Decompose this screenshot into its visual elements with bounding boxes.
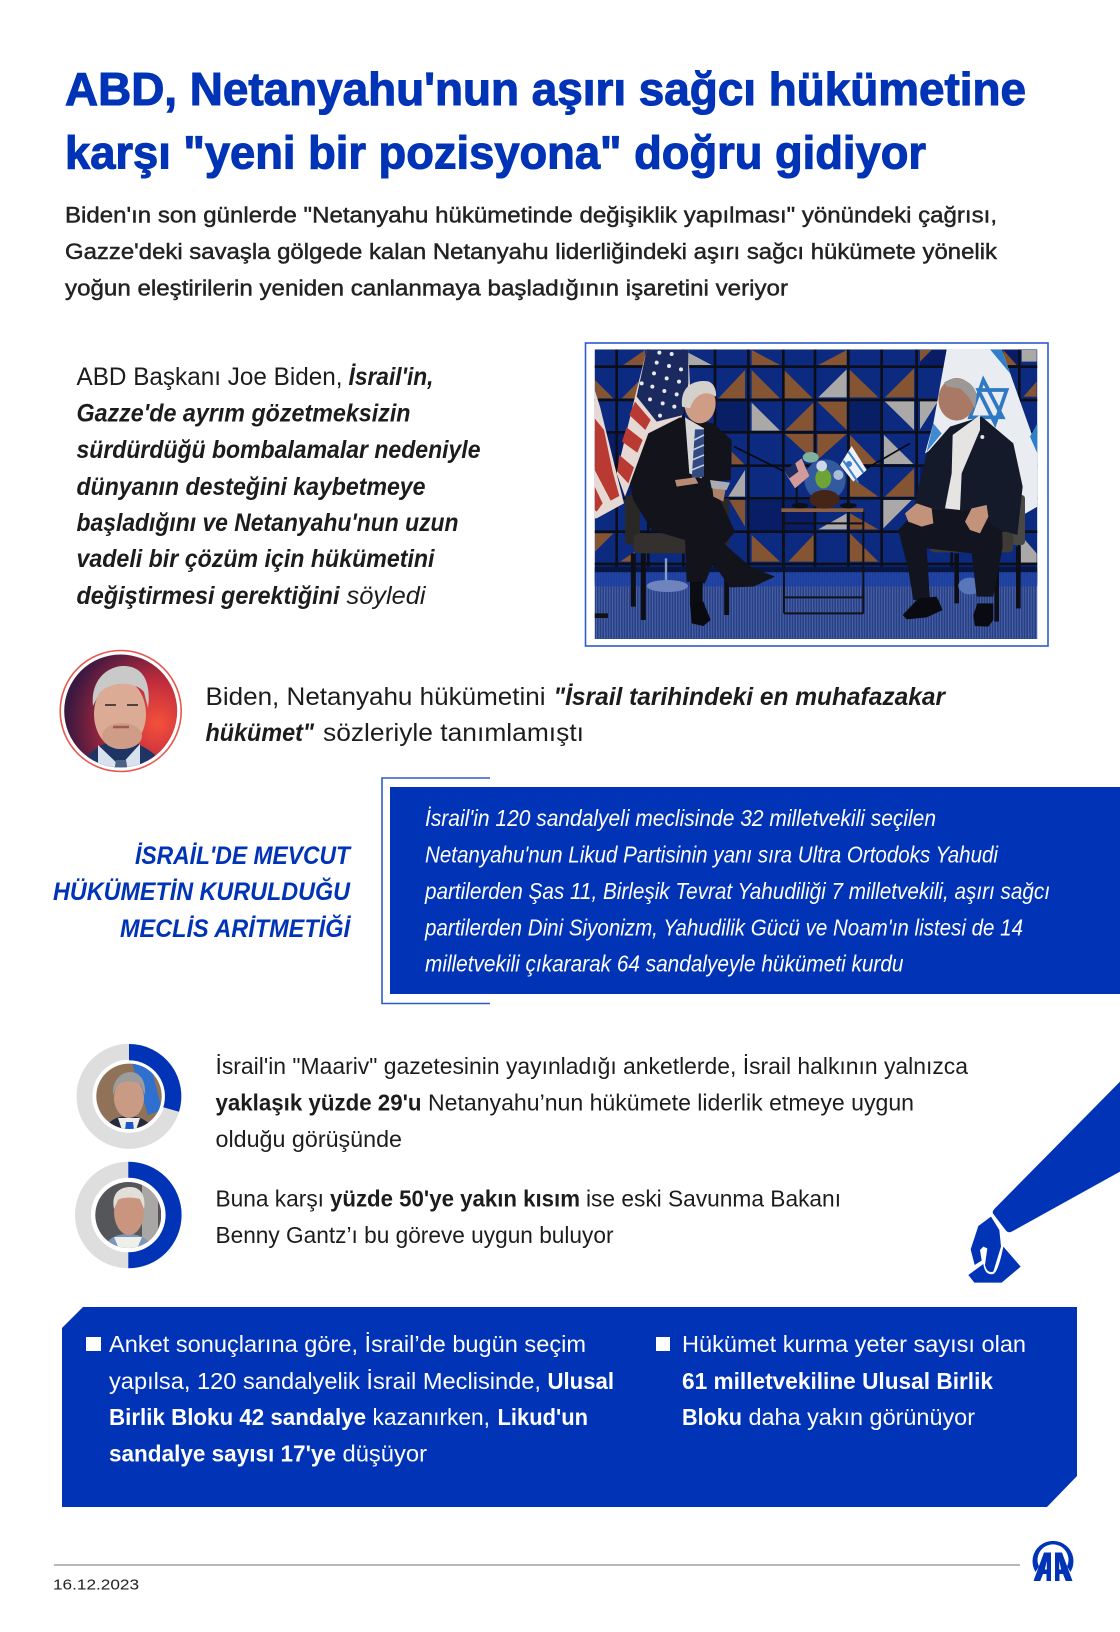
- panel: parliament arithmetic: [390, 787, 1120, 994]
- US flags: [595, 390, 624, 518]
- photo: Biden and Netanyahu meeting: [595, 349, 1037, 639]
- donut: Gantz 50%: [83, 1162, 182, 1268]
- title: karşı "yeni bir pozisyona" doğru gidiyor: [65, 126, 926, 178]
- bracket: [382, 778, 490, 1004]
- panel: poll results: daha yakın görünüyor: [748, 1404, 975, 1430]
- panel: poll results: Anket sonuçlarına göre, İsrail’de bugün seçim: [109, 1331, 586, 1357]
- Netanyahu poll text: olduğu görüşünde: [216, 1126, 402, 1152]
- date: 16.12.2023: [53, 1576, 139, 1594]
- Biden figure: [625, 381, 775, 626]
- panel: poll results: Birlik Bloku 42 sandalye: [109, 1404, 366, 1430]
- title: ABD, Netanyahu'nun aşırı sağcı hükümetine: [65, 63, 1026, 115]
- text block: Biden statement: söyledi: [346, 582, 427, 610]
- text block: Biden statement: dünyanın desteğini kaybetmeye: [76, 473, 426, 501]
- Netanyahu poll text: [216, 1053, 969, 1152]
- Biden quote: "İsrail tarihindeki en muhafazakar: [554, 683, 946, 711]
- Gantz poll text: ise eski Savunma Bakanı: [586, 1186, 841, 1212]
- Biden quote: [206, 683, 946, 747]
- panel: poll results: Bloku: [682, 1404, 742, 1430]
- Netanyahu poll text: Netanyahu’nun hükümete liderlik etmeye uygun: [428, 1090, 914, 1116]
- panel: poll results: kazanırken,: [372, 1404, 490, 1430]
- panel: parliament arithmetic: partilerden Dini Siyonizm, Yahudilik Gücü ve Noam'ın listesi de 14: [424, 914, 1023, 940]
- Gantz poll text: yüzde 50'ye yakın kısım: [330, 1186, 580, 1212]
- wall grid: [595, 349, 1037, 573]
- heading: parliament arithmetic: HÜKÜMETİN KURULDUĞU: [53, 876, 351, 906]
- text block: Biden statement: ABD Başkanı Joe Biden,: [76, 363, 342, 391]
- panel: poll results: 61 milletvekiline Ulusal Birlik: [682, 1368, 994, 1394]
- flag canton: [637, 350, 688, 422]
- panel: poll results: sandalye sayısı 17'ye: [109, 1440, 336, 1466]
- donut: Netanyahu 29%: [84, 1044, 181, 1141]
- text block: Biden statement: sürdürdüğü bombalamalar nedeniyle: [76, 436, 481, 464]
- photo frame: [586, 343, 1048, 646]
- text block: Biden statement: İsrail'in,: [348, 363, 434, 391]
- portrait: Joe Biden: [60, 650, 182, 772]
- panel: parliament arithmetic: İsrail'in 120 sandalyeli meclisinde 32 milletvekili seçilen: [425, 805, 936, 831]
- panel: poll results: Ulusal: [548, 1368, 614, 1394]
- Gantz poll text: [216, 1186, 841, 1248]
- text block: Biden statement: değiştirmesi gerektiğini: [76, 582, 340, 610]
- panel: poll results: Hükümet kurma yeter sayısı olan: [682, 1331, 1026, 1357]
- bullet: [86, 1337, 101, 1351]
- Gantz poll text: Buna karşı: [216, 1186, 324, 1212]
- Biden quote: Biden, Netanyahu hükümetini: [206, 683, 546, 711]
- panel: poll results: [62, 1307, 1077, 1507]
- panel: poll results: yapılsa, 120 sandalyelik İsrail Meclisinde,: [109, 1368, 541, 1394]
- text block: Biden statement: vadeli bir çözüm için hükümetini: [76, 545, 435, 573]
- intro text: [65, 202, 998, 300]
- heading: parliament arithmetic: [53, 842, 352, 943]
- intro text: Biden'ın son günlerde "Netanyahu hükümetinde değişiklik yapılması" yönündeki çağrısı,: [65, 202, 997, 228]
- text block: Biden statement: Gazze'de ayrım gözetmeksizin: [76, 400, 410, 428]
- intro text: yoğun eleştirilerin yeniden canlanmaya başladığının işaretini veriyor: [65, 276, 789, 300]
- panel: parliament arithmetic: Netanyahu'nun Likud Partisinin yanı sıra Ultra Ortodoks Yahudi: [425, 842, 999, 868]
- Biden quote: sözleriyle tanımlamıştı: [323, 719, 584, 747]
- intro text: Gazze'deki savaşla gölgede kalan Netanyahu liderliğindeki aşırı sağcı hükümete yönelik: [65, 239, 998, 264]
- Netanyahu figure: [898, 378, 1025, 627]
- Israeli flag: [925, 349, 1037, 517]
- heading: parliament arithmetic: MECLİS ARİTMETİĞİ: [120, 913, 352, 943]
- icon: hand casting ballot: [968, 1082, 1120, 1283]
- text block: Biden statement: başladığını ve Netanyahu'nun uzun: [76, 509, 458, 537]
- wall tiles: [595, 350, 1037, 562]
- panel: parliament arithmetic: milletvekili çıkararak 64 sandalyeyle hükümeti kurdu: [425, 950, 904, 976]
- table and centerpiece: [734, 443, 910, 613]
- title: [65, 63, 1026, 178]
- bullet: [656, 1337, 670, 1351]
- logo: AA: [1032, 1541, 1074, 1581]
- panel: parliament arithmetic: partilerden Şas 11, Birleşik Tevrat Yahudiliği 7 milletvekili, aşırı sağcı: [424, 878, 1050, 904]
- Gantz poll text: Benny Gantz’ı bu göreve uygun buluyor: [216, 1222, 614, 1248]
- panel: poll results: düşüyor: [342, 1440, 427, 1466]
- text block: Biden statement: [76, 363, 481, 610]
- Netanyahu poll text: yaklaşık yüzde 29'u: [216, 1090, 422, 1116]
- heading: parliament arithmetic: İSRAİL'DE MEVCUT: [135, 842, 352, 870]
- Biden quote: hükümet": [206, 719, 315, 747]
- floor: [595, 572, 1037, 639]
- panel: poll results: Likud'un: [498, 1404, 588, 1430]
- Netanyahu poll text: İsrail'in "Maariv" gazetesinin yayınladığı anketlerde, İsrail halkının yalnızca: [216, 1053, 969, 1079]
